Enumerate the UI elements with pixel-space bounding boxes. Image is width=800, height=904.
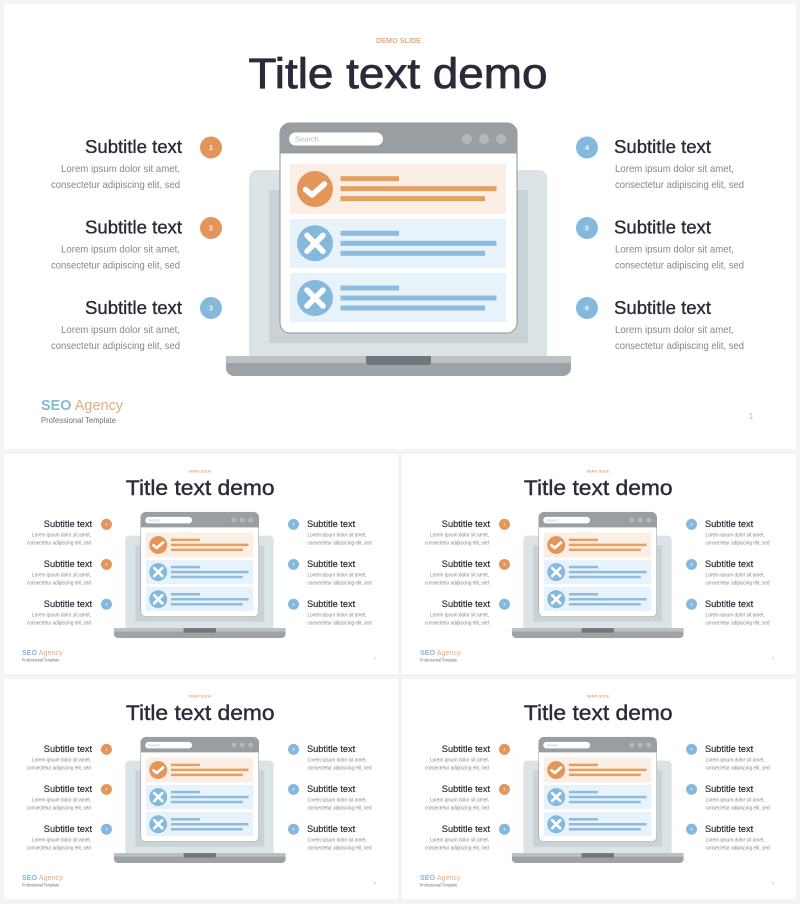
panel: thumbnail slide 5	[402, 679, 796, 899]
page number: 1	[749, 412, 754, 421]
logo	[420, 873, 461, 887]
item 4	[576, 136, 744, 191]
page number: 3	[772, 655, 775, 660]
item texts and number badges: 2	[503, 788, 506, 792]
logo: SEO Agency	[420, 648, 461, 657]
item texts and number badges: Subtitle text	[44, 519, 93, 529]
item texts and number badges: Subtitle text	[307, 519, 356, 529]
item texts and number badges: Lorem ipsum dolor sit amet,	[307, 573, 367, 579]
logo	[420, 648, 461, 662]
item texts and number badges: Subtitle text	[44, 744, 93, 754]
icon: laptop with browser window: Search	[295, 134, 319, 144]
item texts and number badges: 2	[503, 563, 506, 567]
item texts and number badges: Lorem ipsum dolor sit amet,	[32, 838, 91, 844]
item texts and number badges: 2	[105, 563, 108, 567]
eyebrow label: DEMO SLIDE	[587, 469, 610, 473]
item texts and number badges: 5	[690, 788, 693, 792]
item texts and number badges: consectetur adipiscing elit, sed	[705, 766, 770, 772]
item texts and number badges: 5	[292, 788, 295, 792]
item texts and number badges: Lorem ipsum dolor sit amet,	[307, 533, 367, 539]
item texts and number badges: Subtitle text	[705, 519, 754, 529]
item texts and number badges: Subtitle text	[307, 559, 356, 569]
item texts and number badges: Subtitle text	[442, 824, 491, 834]
item texts and number badges: Subtitle text	[307, 824, 356, 834]
item texts and number badges: Lorem ipsum dolor sit amet,	[32, 573, 91, 579]
item texts and number badges: Subtitle text	[442, 744, 491, 754]
logo: Professional Template	[420, 657, 458, 662]
item texts and number badges: consectetur adipiscing elit, sed	[705, 846, 770, 852]
item texts and number badges: 5	[690, 563, 693, 567]
item texts and number badges: 6	[690, 827, 693, 831]
page number: 2	[374, 655, 376, 660]
icon: laptop with browser window: Search	[546, 743, 558, 747]
item texts and number badges: 2	[105, 788, 108, 792]
item texts and number badges: consectetur adipiscing elit, sed	[425, 846, 489, 852]
panel: main slide	[4, 4, 796, 449]
item 6: Subtitle text	[614, 298, 711, 318]
item texts and number badges: Lorem ipsum dolor sit amet,	[307, 758, 367, 764]
item texts and number badges: Lorem ipsum dolor sit amet,	[32, 798, 91, 804]
logo: SEO Agency	[420, 873, 461, 882]
item texts and number badges: Subtitle text	[705, 599, 754, 609]
icon: laptop with browser window	[226, 123, 571, 376]
item texts and number badges: Subtitle text	[44, 784, 93, 794]
panel: thumbnail slide 2	[4, 454, 398, 674]
icon: laptop with browser window	[512, 737, 684, 863]
title: Title text demo	[248, 50, 548, 98]
item texts and number badges: consectetur adipiscing elit, sed	[27, 846, 91, 852]
title: Title text demo	[126, 476, 275, 500]
icon: laptop with browser window	[512, 512, 684, 638]
item texts and number badges	[425, 519, 770, 627]
item texts and number badges: Lorem ipsum dolor sit amet,	[430, 758, 489, 764]
item texts and number badges: Subtitle text	[705, 824, 754, 834]
logo: SEO Agency	[22, 873, 63, 882]
page number: 5	[772, 880, 775, 885]
item texts and number badges: 6	[292, 827, 295, 831]
item texts and number badges: Lorem ipsum dolor sit amet,	[307, 798, 367, 804]
item texts and number badges: 6	[690, 602, 693, 606]
item 2: 2	[209, 224, 213, 232]
item texts and number badges: Lorem ipsum dolor sit amet,	[307, 613, 367, 619]
item texts and number badges: Subtitle text	[44, 599, 93, 609]
item texts and number badges: Subtitle text	[442, 519, 491, 529]
item 2: Subtitle text	[85, 218, 182, 238]
item texts and number badges: consectetur adipiscing elit, sed	[27, 541, 91, 547]
item texts and number badges: Subtitle text	[705, 559, 754, 569]
icon: laptop with browser window	[114, 737, 286, 863]
panel: thumbnail slide 3	[402, 454, 796, 674]
item texts and number badges: Lorem ipsum dolor sit amet,	[430, 798, 489, 804]
item 1: consectetur adipiscing elit, sed	[51, 179, 180, 191]
item 3: Lorem ipsum dolor sit amet,	[61, 324, 180, 336]
item texts and number badges: Subtitle text	[44, 824, 93, 834]
item texts and number badges: 4	[292, 748, 295, 752]
item texts and number badges: Lorem ipsum dolor sit amet,	[705, 758, 765, 764]
logo	[22, 648, 63, 662]
item 6: 6	[585, 304, 589, 312]
item texts and number badges: consectetur adipiscing elit, sed	[705, 541, 770, 547]
item texts and number badges	[425, 744, 770, 852]
item texts and number badges: 3	[503, 827, 506, 831]
item texts and number badges: consectetur adipiscing elit, sed	[307, 766, 372, 772]
item texts and number badges: consectetur adipiscing elit, sed	[27, 766, 91, 772]
item 5	[576, 217, 744, 272]
item 4: 4	[585, 143, 590, 152]
item texts and number badges: 1	[105, 748, 108, 752]
item texts and number badges: Subtitle text	[307, 784, 356, 794]
item texts and number badges: Lorem ipsum dolor sit amet,	[705, 573, 765, 579]
logo: SEO Agency	[22, 648, 63, 657]
item texts and number badges: consectetur adipiscing elit, sed	[705, 806, 770, 812]
item 2: Lorem ipsum dolor sit amet,	[61, 244, 180, 256]
logo: Professional Template	[41, 415, 116, 425]
item texts and number badges: 4	[690, 748, 693, 752]
item texts and number badges: Subtitle text	[442, 599, 491, 609]
item texts and number badges: Subtitle text	[307, 744, 356, 754]
item texts and number badges: Lorem ipsum dolor sit amet,	[430, 613, 489, 619]
item texts and number badges: consectetur adipiscing elit, sed	[307, 581, 372, 587]
item texts and number badges: consectetur adipiscing elit, sed	[425, 766, 489, 772]
item texts and number badges: 4	[292, 523, 295, 527]
icon: laptop with browser window	[114, 512, 286, 638]
item texts and number badges: 4	[690, 523, 693, 527]
item 5: consectetur adipiscing elit, sed	[615, 260, 744, 272]
item texts and number badges: Subtitle text	[705, 784, 754, 794]
item texts and number badges: consectetur adipiscing elit, sed	[425, 541, 489, 547]
item 5: Lorem ipsum dolor sit amet,	[615, 244, 734, 256]
item texts and number badges: Lorem ipsum dolor sit amet,	[32, 758, 91, 764]
item 5: 5	[585, 224, 589, 232]
item 2: consectetur adipiscing elit, sed	[51, 260, 180, 272]
item 3: consectetur adipiscing elit, sed	[51, 340, 180, 352]
item texts and number badges: Subtitle text	[307, 599, 356, 609]
title: Title text demo	[126, 701, 275, 725]
item 4: consectetur adipiscing elit, sed	[615, 179, 744, 191]
item 1: 1	[209, 143, 213, 152]
item texts and number badges: Lorem ipsum dolor sit amet,	[705, 613, 765, 619]
item texts and number badges: consectetur adipiscing elit, sed	[425, 806, 489, 812]
item 2	[51, 217, 222, 272]
eyebrow label: DEMO SLIDE	[189, 469, 212, 473]
item texts and number badges: Subtitle text	[44, 559, 93, 569]
item texts and number badges: Lorem ipsum dolor sit amet,	[430, 573, 489, 579]
eyebrow label: DEMO SLIDE	[587, 694, 610, 698]
item texts and number badges: 5	[292, 563, 295, 567]
item texts and number badges: consectetur adipiscing elit, sed	[425, 581, 489, 587]
item texts and number badges: Lorem ipsum dolor sit amet,	[32, 613, 91, 619]
logo	[22, 873, 63, 887]
item 1: Subtitle text	[85, 137, 182, 157]
item texts and number badges	[27, 744, 372, 852]
logo	[41, 397, 123, 425]
item 6	[576, 297, 744, 352]
item texts and number badges: consectetur adipiscing elit, sed	[307, 806, 372, 812]
item texts and number badges: Lorem ipsum dolor sit amet,	[705, 798, 765, 804]
item texts and number badges: Subtitle text	[705, 744, 754, 754]
item texts and number badges: consectetur adipiscing elit, sed	[705, 581, 770, 587]
item 1: Lorem ipsum dolor sit amet,	[61, 163, 180, 175]
icon: laptop with browser window: Search	[546, 518, 558, 522]
item 3: Subtitle text	[85, 298, 182, 318]
item texts and number badges: consectetur adipiscing elit, sed	[307, 541, 372, 547]
logo: SEO Agency	[41, 397, 123, 414]
item texts and number badges: Lorem ipsum dolor sit amet,	[430, 838, 489, 844]
item texts and number badges: 1	[105, 523, 108, 527]
logo: Professional Template	[22, 657, 60, 662]
item 6: Lorem ipsum dolor sit amet,	[615, 324, 734, 336]
item texts and number badges: consectetur adipiscing elit, sed	[307, 621, 372, 627]
item texts and number badges: 1	[503, 748, 506, 752]
page number: 4	[374, 880, 377, 885]
item 5: Subtitle text	[614, 218, 711, 238]
item texts and number badges: consectetur adipiscing elit, sed	[705, 621, 770, 627]
item texts and number badges: consectetur adipiscing elit, sed	[27, 581, 91, 587]
item texts and number badges: 3	[105, 827, 108, 831]
icon: laptop with browser window: Search	[148, 518, 160, 522]
item texts and number badges: Lorem ipsum dolor sit amet,	[705, 838, 765, 844]
panel: thumbnail slide 4	[4, 679, 398, 899]
eyebrow label: DEMO SLIDE	[189, 694, 212, 698]
title: Title text demo	[524, 476, 673, 500]
item texts and number badges	[27, 519, 372, 627]
item 1	[51, 136, 222, 191]
item 4: Lorem ipsum dolor sit amet,	[615, 163, 734, 175]
title: Title text demo	[524, 701, 673, 725]
item texts and number badges: consectetur adipiscing elit, sed	[307, 846, 372, 852]
logo: Professional Template	[22, 882, 60, 887]
item texts and number badges: Subtitle text	[442, 784, 491, 794]
item 3: 3	[209, 304, 213, 312]
item 6: consectetur adipiscing elit, sed	[615, 340, 744, 352]
eyebrow label: DEMO SLIDE	[376, 36, 421, 45]
item texts and number badges: consectetur adipiscing elit, sed	[425, 621, 489, 627]
item texts and number badges: Subtitle text	[442, 559, 491, 569]
logo: Professional Template	[420, 882, 458, 887]
item texts and number badges: 3	[105, 602, 108, 606]
item texts and number badges: Lorem ipsum dolor sit amet,	[705, 533, 765, 539]
item texts and number badges: 6	[292, 602, 295, 606]
item texts and number badges: 3	[503, 602, 506, 606]
icon: laptop with browser window: Search	[148, 743, 160, 747]
item texts and number badges: Lorem ipsum dolor sit amet,	[307, 838, 367, 844]
item texts and number badges: 1	[503, 523, 506, 527]
item 3	[51, 297, 222, 352]
item texts and number badges: Lorem ipsum dolor sit amet,	[32, 533, 91, 539]
item texts and number badges: consectetur adipiscing elit, sed	[27, 806, 91, 812]
item texts and number badges: Lorem ipsum dolor sit amet,	[430, 533, 489, 539]
item texts and number badges: consectetur adipiscing elit, sed	[27, 621, 91, 627]
item 4: Subtitle text	[614, 137, 711, 157]
